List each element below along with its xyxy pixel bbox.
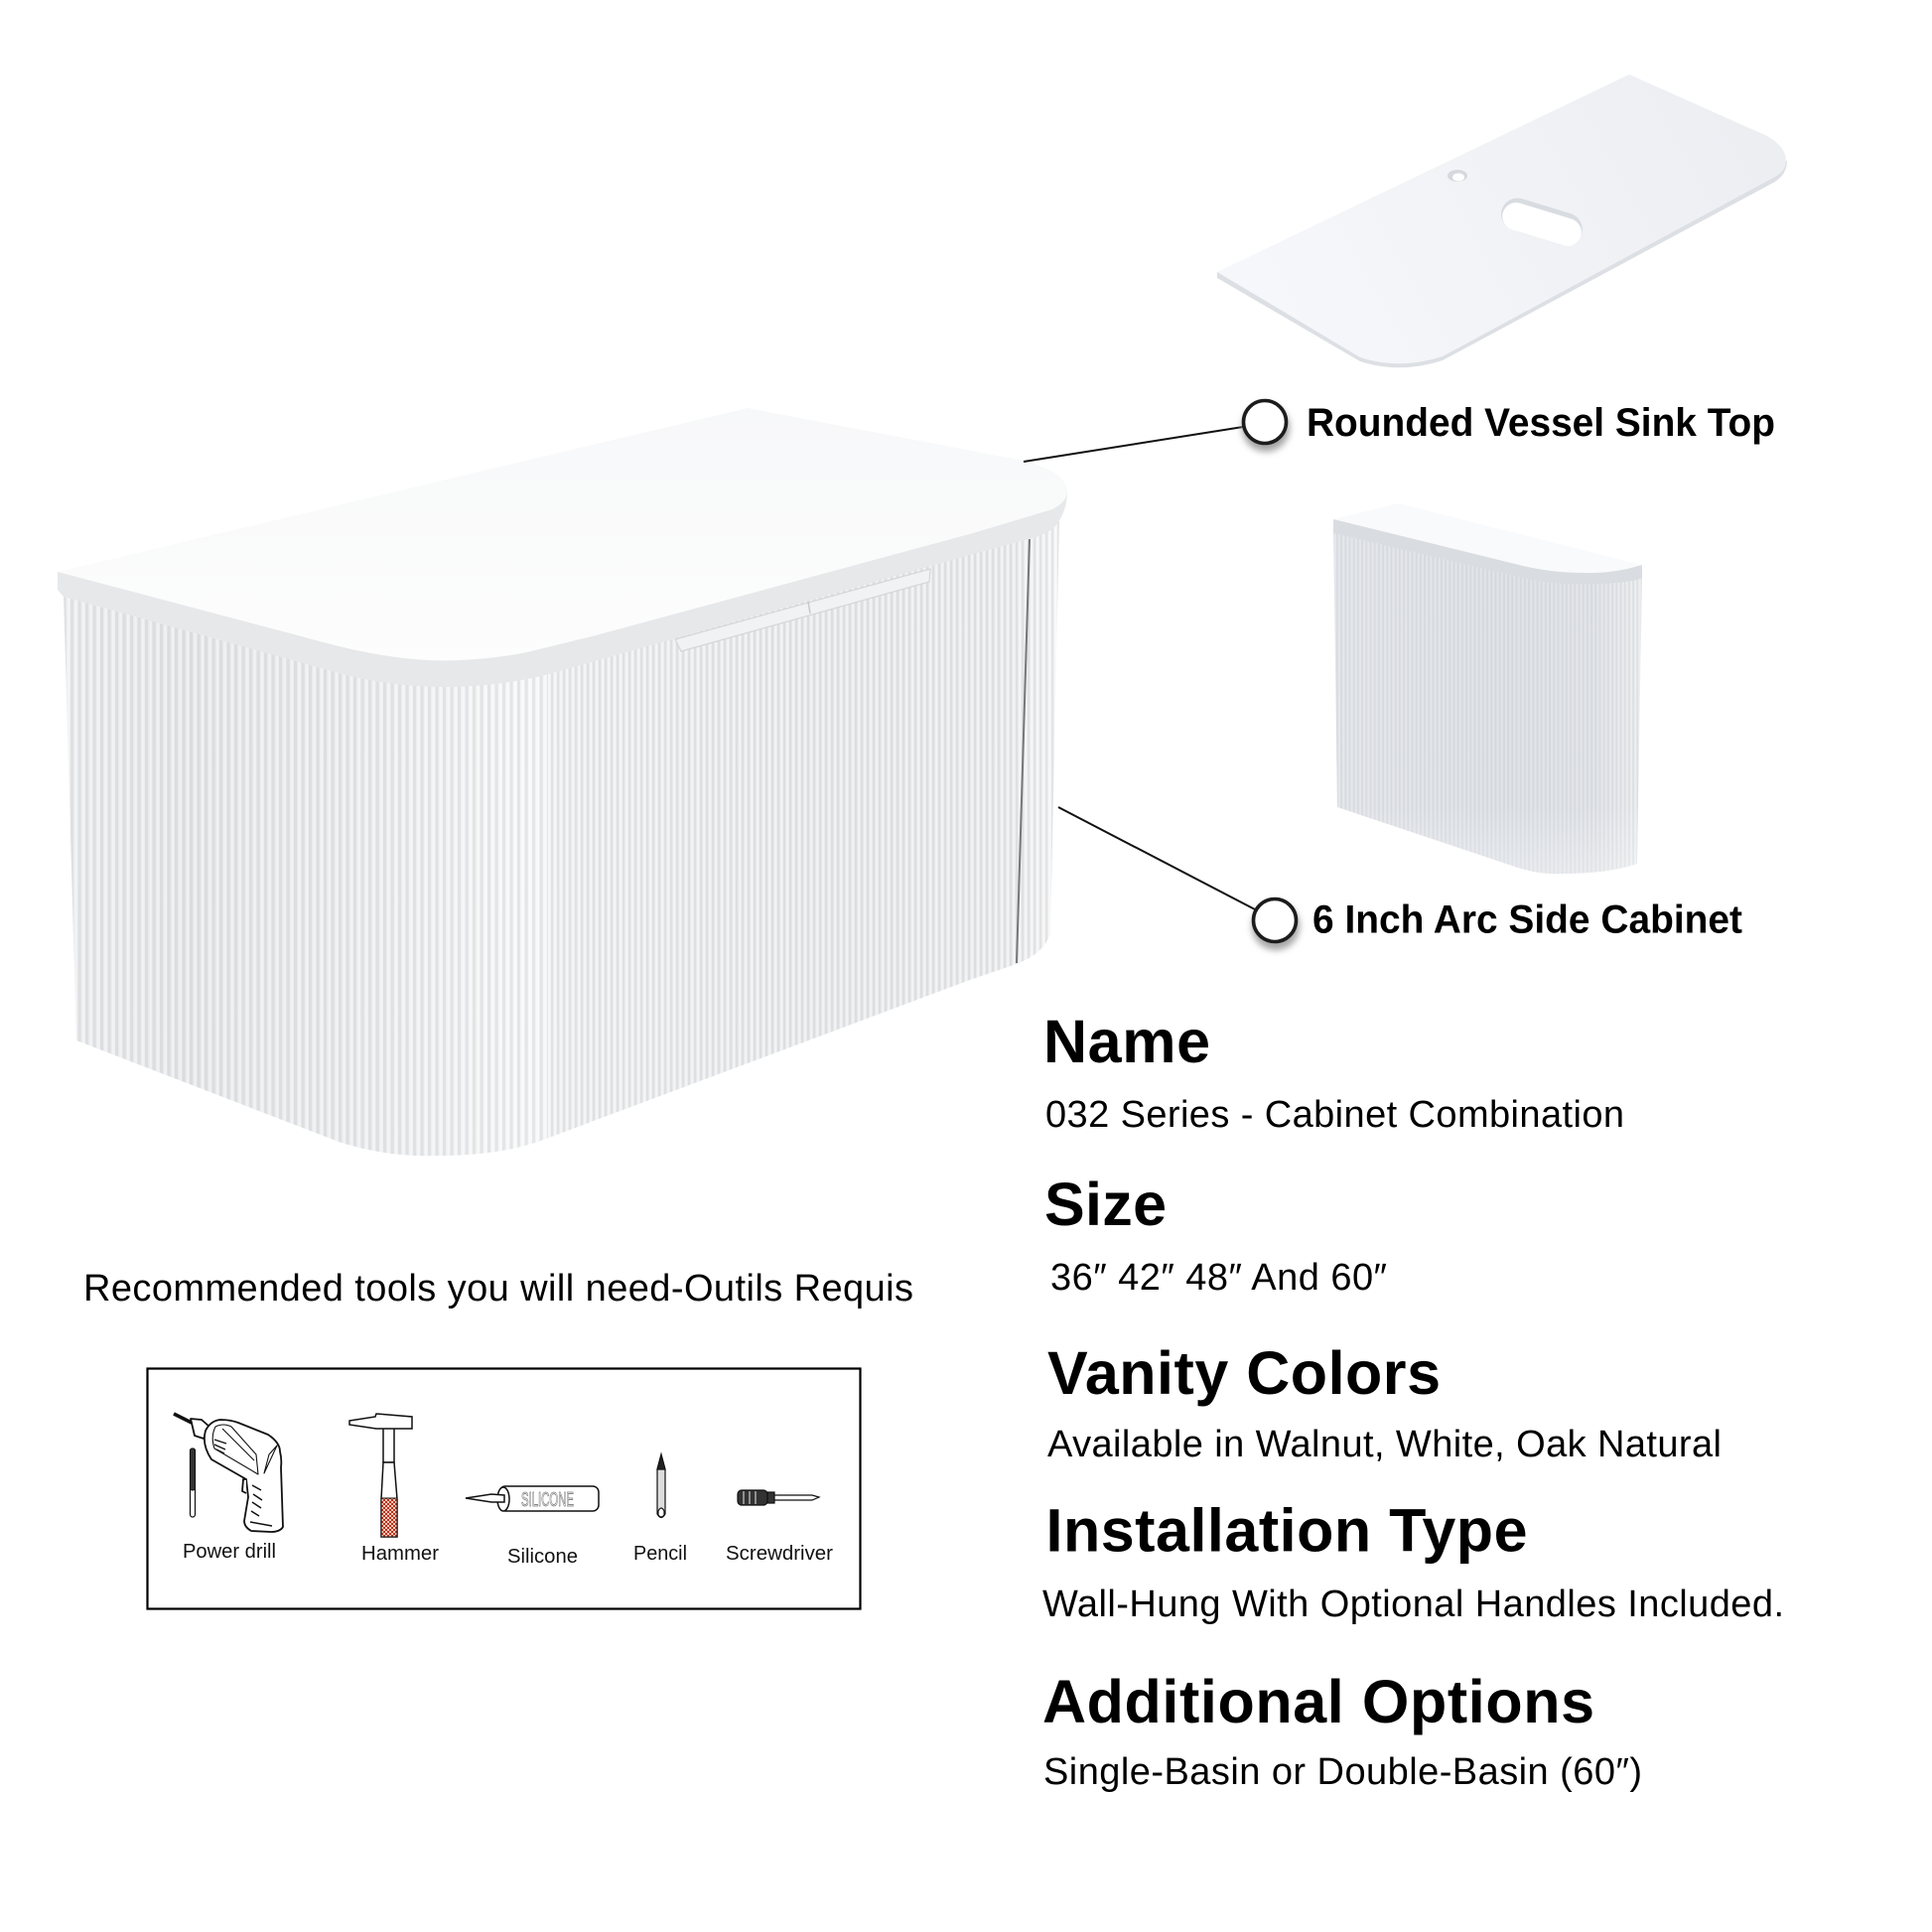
countertop surface [58,408,1067,660]
spec: additional options [1042,1668,1642,1793]
spec: size [1044,1171,1387,1299]
spec: vanity colors: Available in Walnut, White, Oak Natural [1047,1424,1722,1465]
spec: installation type: Installation Type [1046,1497,1527,1565]
faucet hole [1448,170,1467,182]
label: screwdriver: Screwdriver [726,1543,833,1565]
leader line: side cabinet [1058,807,1255,909]
icon: power drill [174,1414,283,1532]
spec: additional options: Additional Options [1042,1668,1594,1735]
tools panel [147,1368,860,1608]
callout marker: side cabinet [1252,899,1300,950]
icon: hammer [349,1414,412,1537]
label: pencil: Pencil [633,1543,687,1565]
spec: size: Size [1044,1171,1167,1238]
spec: size: 36″ 42″ 48″ And 60″ [1050,1257,1387,1299]
main cabinet illustration [58,492,1067,1156]
side cabinet illustration [1333,503,1642,874]
callout label: sink top: Rounded Vessel Sink Top [1307,401,1775,445]
spec: installation type [1042,1497,1784,1625]
drawer handle [675,569,930,651]
side cabinet edge band [1333,519,1642,584]
label: power drill: Power drill [183,1541,276,1563]
icon: screwdriver [738,1490,819,1505]
side cabinet body [1333,526,1642,874]
icon: pencil [657,1454,665,1517]
label: hammer: Hammer [361,1543,439,1565]
label: silicone: Silicone [507,1546,578,1568]
spec: vanity colors [1047,1339,1722,1465]
cabinet fluted body [64,521,1059,1156]
side cabinet top [1333,503,1642,573]
countertop edge band [58,491,1067,687]
spec: vanity colors: Vanity Colors [1047,1339,1441,1407]
spec: installation type: Wall-Hung With Optional Handles Included. [1042,1584,1784,1625]
spec: additional options: Single-Basin or Double-Basin (60″) [1043,1751,1642,1793]
basin slot [1497,194,1587,250]
vessel sink top illustration [1217,74,1787,367]
side door seam [1017,539,1030,963]
callout label: side cabinet: 6 Inch Arc Side Cabinet [1312,897,1742,941]
icon: silicone tube [466,1486,599,1511]
spec: name: Name [1043,1008,1210,1075]
leader line: sink top [1024,427,1243,462]
spec: name: 032 Series - Cabinet Combination [1045,1094,1624,1136]
spec: name [1043,1008,1624,1136]
callout marker: sink top [1242,401,1290,452]
tools heading: Recommended tools you will need-Outils Requis [83,1268,913,1310]
icon: silicone tube: SILICONE [521,1489,574,1511]
